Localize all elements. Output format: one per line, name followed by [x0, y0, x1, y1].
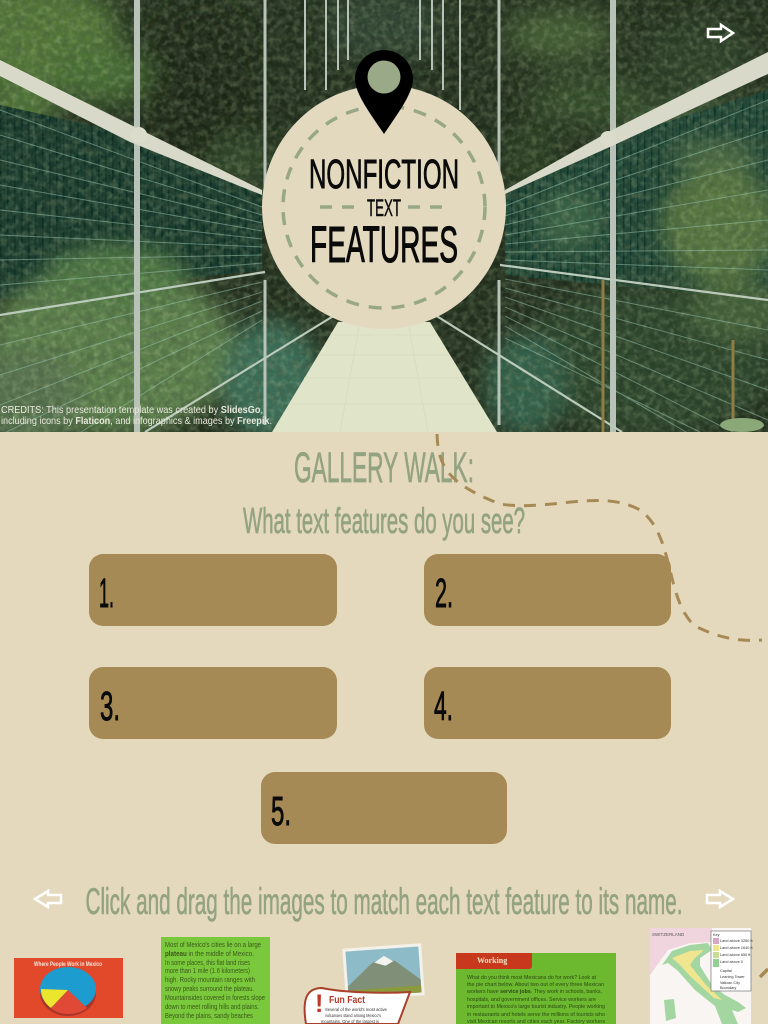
thumbnail: text passage: down to meet rolling hills and plains.	[165, 1004, 259, 1011]
answer box 2: 2.	[435, 570, 453, 616]
thumbnail: fun fact with photo: mountains. One of the largest is	[321, 1019, 380, 1024]
answer box 5: 5.	[271, 788, 291, 834]
thumbnail: map of Italy: Land above 3280 ft	[720, 939, 753, 943]
thumbnail: section heading passage	[456, 953, 616, 1024]
thumbnail: fun fact with photo: !	[315, 990, 323, 1018]
thumbnail: section heading passage: important to Mexico's large tourist industry. People working	[467, 1004, 605, 1010]
thumbnail: text passage: Mountainsides covered in forests slope	[165, 995, 265, 1002]
answer box 1	[89, 554, 337, 626]
decorative dashed trail	[437, 434, 762, 640]
dead branches	[603, 280, 733, 432]
previous arrow	[35, 891, 61, 907]
next arrow top	[708, 25, 733, 41]
bridge deck	[272, 322, 497, 432]
answer box 3: 3.	[100, 683, 120, 729]
credits text	[1, 404, 272, 427]
thumbnail: pie chart: Where People Work in Mexico	[34, 961, 102, 968]
thumbnail: map of Italy: Vatican City	[720, 981, 740, 985]
left fence panel	[0, 105, 262, 300]
thumbnail: map of Italy: Boundary	[720, 986, 736, 990]
dashed ring	[283, 106, 485, 308]
handrails	[0, 60, 262, 195]
right fence panel	[505, 90, 768, 300]
heading: gallery walk: GALLERY WALK:	[294, 444, 474, 492]
thumbnail: fun fact with photo: Fun Fact	[329, 995, 366, 1006]
thumbnail: map of Italy: Leaning Tower	[720, 975, 745, 979]
thumbnail: map of Italy: Key	[713, 933, 720, 937]
thumbnail: section heading passage: in restaurants and hotels serve the millions of tourists who	[467, 1012, 605, 1018]
thumbnail: text passage: Most of Mexico's cities lie on a large	[165, 942, 261, 949]
title line 3: FEATURES	[310, 216, 458, 273]
thumbnail: map of Italy: SWITZERLAND	[652, 932, 685, 937]
answer box 5	[261, 772, 507, 844]
title line 1: NONFICTION	[309, 151, 459, 197]
thumbnail: section heading passage: the pie chart below. About two out of every three Mexican	[467, 982, 604, 988]
next arrow bottom	[707, 891, 733, 907]
vertical cables	[137, 0, 613, 432]
hero photo: suspension bridge in forest	[0, 0, 768, 480]
thumbnail: fun fact with photo	[305, 943, 425, 1024]
dashes beside TEXT	[320, 205, 446, 209]
credits text: CREDITS: This presentation template was created by SlidesGo,	[1, 404, 263, 416]
thumbnail: text passage: snowy peaks surround the plateau.	[165, 986, 254, 993]
answer box 3	[89, 667, 337, 739]
title line 2: TEXT	[367, 195, 401, 222]
credits text: including icons by Flaticon, and infographics & images by Freepik.	[1, 415, 272, 427]
thumbnail: map of Italy: Land above 650 ft	[720, 953, 751, 957]
icon: map pin	[355, 50, 413, 134]
answer box 4: 4.	[434, 683, 453, 729]
thumbnail: map of Italy: Capital	[720, 969, 732, 973]
answer box 2	[424, 554, 671, 626]
thumbnail: section heading passage: workers have service jobs. They work in schools, banks,	[466, 989, 602, 995]
thumbnail: fun fact with photo: volcanoes stand among Mexico's	[325, 1013, 382, 1018]
title badge	[262, 50, 506, 329]
thumbnail: text passage: high. Rocky mountain ranges with	[165, 977, 255, 984]
badge circle	[262, 85, 506, 329]
thumbnail: section heading passage: hospitals, and government offices. Service workers are	[467, 997, 596, 1003]
thumbnail: section heading passage: What do you think most Mexicans do for work? Look at	[467, 975, 596, 981]
thumbnail: fun fact with photo: Several of the world's most active	[325, 1007, 387, 1012]
thumbnail: text passage: plateau in the middle of Mexico.	[165, 951, 254, 958]
thumbnail: text passage: In some places, this flat land rises	[165, 960, 250, 967]
thumbnail: pie chart	[14, 958, 123, 1018]
thumbnail: section heading passage: Working	[477, 956, 507, 965]
thumbnail: text passage: more than 1 mile (1.6 kilometers)	[165, 968, 250, 975]
main wires	[0, 265, 768, 432]
thumbnail: map of Italy	[650, 928, 753, 1024]
thumbnail: map of Italy: Land above 0	[720, 960, 743, 964]
answer box 1: 1.	[99, 570, 114, 616]
thumbnail: map of Italy: Land above 1640 ft	[720, 946, 753, 950]
thumbnail: text passage: Beyond the plains, sandy beaches	[165, 1013, 253, 1020]
lower foliage	[0, 139, 768, 450]
subheading: question: What text features do you see?	[243, 500, 525, 541]
thumbnail: text passage	[161, 937, 270, 1024]
partial element at right edge	[760, 969, 768, 977]
fence wires	[0, 100, 768, 432]
answer box 4	[424, 667, 671, 739]
